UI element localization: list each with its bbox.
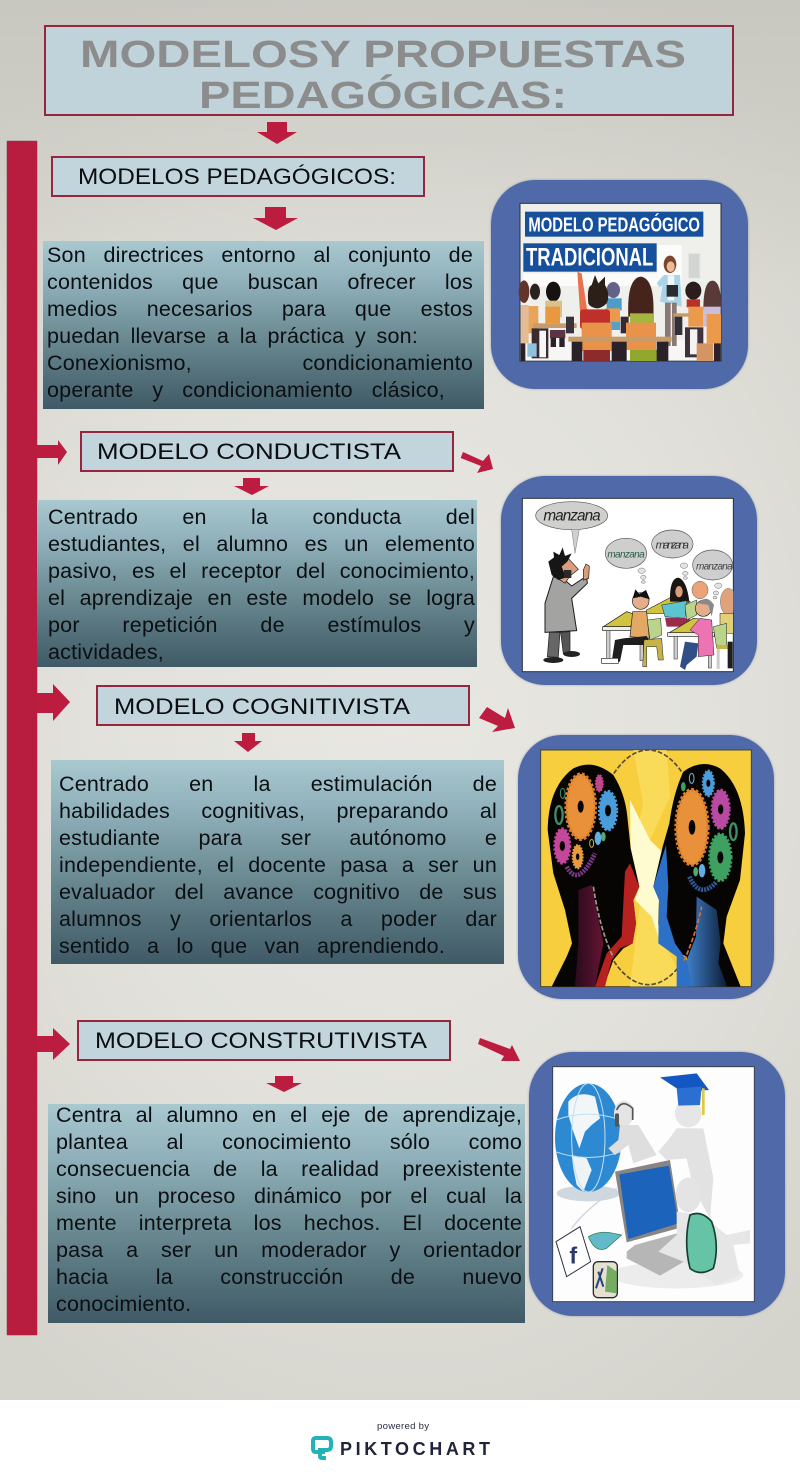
panel: construtivista text: hacia la construcción de nuevo: [56, 1265, 522, 1289]
teacher speech bubble: [536, 502, 608, 553]
panel: conductista text: [37, 500, 477, 667]
image: manzana classroom cartoon: [501, 476, 757, 685]
panel: definition text: Conexionismo, condicionamiento: [47, 351, 473, 375]
students: [519, 272, 721, 361]
title banner: MODELOSY PROPUESTAS: [80, 34, 686, 76]
heading: modelo construtivista: [77, 1020, 451, 1061]
arrow: cognitivista heading to text: [234, 733, 262, 752]
heading: modelo cognitivista: MODELO COGNITIVISTA: [114, 694, 410, 719]
image: students with globe and laptop: [529, 1052, 785, 1316]
footer: powered by piktochart: PIKTOCHART: [340, 1439, 490, 1459]
panel: cognitivista text: evaluador del avance cognitivo de sus: [59, 880, 497, 904]
arrow: conductista to image: [460, 452, 493, 473]
right head silhouette: [653, 764, 745, 987]
panel: cognitivista text: independiente, el docente pasa a ser un: [59, 853, 497, 877]
arrow: cognitivista to image: [479, 707, 515, 732]
teacher: [657, 256, 682, 346]
student thought bubbles: manzana: [696, 561, 733, 572]
panel: definition text: Son directrices entorno al conjunto de: [47, 243, 473, 267]
laptop: [615, 1160, 684, 1276]
panel: cognitivista text: habilidades cognitivas, preparando al: [59, 799, 497, 823]
teacher speech bubble: manzana: [543, 508, 601, 525]
panel: definition text: [43, 241, 484, 409]
panel: construtivista text: plantea al conocimiento sólo como: [56, 1130, 522, 1154]
panel: construtivista text: mente interpreta los hechos. El docente: [56, 1211, 522, 1235]
arrow: title to first heading: [257, 122, 297, 144]
label: tradicional: TRADICIONAL: [526, 245, 653, 272]
arrow: conductista heading to text: [234, 478, 269, 495]
panel: definition text: operante y condicionamiento clásico,: [47, 378, 445, 402]
seated students: [602, 578, 736, 670]
panel: definition text: puedan llevarse a la práctica y son:: [47, 324, 418, 348]
heading: modelos pedagogicos: [51, 156, 425, 197]
panel: cognitivista text: estudiante para ser autónomo e: [59, 826, 497, 850]
student thought bubbles: manzana: [656, 540, 689, 552]
panel: cognitivista text: [51, 760, 504, 964]
student thought bubbles: manzana: [607, 549, 645, 560]
social media icons: [556, 1188, 622, 1298]
arrow: heading to definition: [253, 207, 298, 230]
arrow: bar to modelo construtivista: [37, 1028, 70, 1060]
panel: construtivista text: [48, 1104, 525, 1323]
title banner: PEDAGÓGICAS:: [199, 73, 567, 116]
panel: conductista text: actividades,: [48, 640, 164, 664]
panel: definition text: medios necesarios para que estos: [47, 297, 473, 321]
panel: construtivista text: pasa a ser un moderador y orientador: [56, 1238, 522, 1262]
footer: powered by piktochart: powered by: [377, 1421, 429, 1432]
social media icons: f: [569, 1242, 577, 1268]
panel: cognitivista text: sentido a lo que van aprendiendo.: [59, 934, 445, 958]
panel: conductista text: por repetición de estímulos y: [48, 613, 475, 637]
panel: construtivista text: conocimiento.: [56, 1292, 191, 1316]
seated student with backpack: [658, 1178, 750, 1285]
panel: conductista text: el aprendizaje en este modelo se logra: [48, 586, 475, 610]
panel: cognitivista text: Centrado en la estimulación de: [59, 772, 497, 796]
arrow: bar to modelo conductista: [37, 440, 67, 465]
image: two heads with gears: [518, 735, 774, 999]
figure with graduation cap: [658, 1073, 713, 1218]
panel: cognitivista text: alumnos y orientarlos a poder dar: [59, 907, 497, 931]
arrow: bar to modelo cognitivista: [37, 684, 70, 721]
panel: conductista text: pasivo, es el receptor del conocimiento,: [48, 559, 475, 583]
left head silhouette: [548, 765, 639, 987]
globe: [555, 1083, 622, 1192]
arrow: construtivista to image: [478, 1038, 520, 1061]
heading: modelos pedagogicos: MODELOS PEDAGÓGICOS:: [78, 164, 396, 189]
panel: construtivista text: Centra al alumno en el eje de aprendizaje,: [56, 1103, 522, 1127]
teacher figure: [543, 547, 589, 663]
figure with headset: [608, 1101, 657, 1163]
heading: modelo conductista: MODELO CONDUCTISTA: [97, 439, 401, 464]
heading: modelo conductista: [80, 431, 454, 472]
student thought bubbles: [605, 530, 733, 599]
heading: modelo construtivista: MODELO CONSTRUTIVISTA: [95, 1028, 427, 1053]
left head gears: [555, 774, 617, 875]
panel: definition text: contenidos que buscan ofrecer los: [47, 270, 473, 294]
panel: conductista text: estudiantes, el alumno es un elemento: [48, 532, 475, 556]
title banner: [44, 25, 734, 116]
heading: modelo cognitivista: [96, 685, 470, 726]
panel: construtivista text: sino un proceso dinámico por el cual la: [56, 1184, 522, 1208]
right head gears: [676, 771, 737, 890]
vertical timeline bar: [7, 141, 37, 1335]
image: modelo pedagogico tradicional: [491, 180, 748, 389]
panel: construtivista text: consecuencia de la realidad preexistente: [56, 1157, 522, 1181]
footer: powered by piktochart: [0, 1400, 800, 1481]
logo mark: [313, 1438, 331, 1458]
arrow: construtivista heading to text: [266, 1076, 302, 1092]
panel: conductista text: Centrado en la conducta del: [48, 505, 475, 529]
